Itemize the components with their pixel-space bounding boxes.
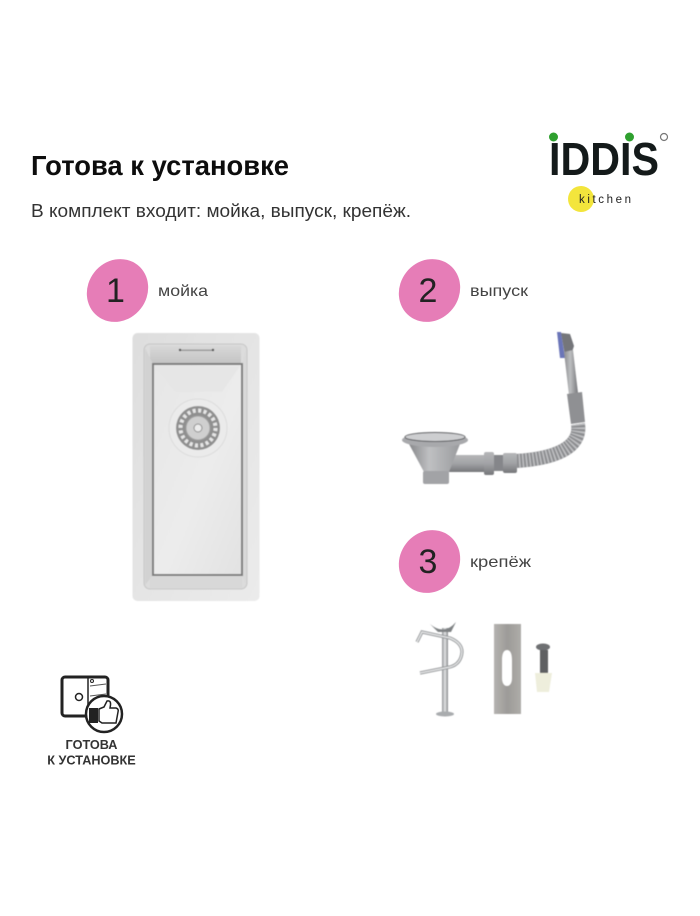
logo: IDDIS kitchen: kitchen [579, 194, 631, 206]
blue clip [557, 332, 565, 358]
mounting hardware photo [417, 622, 552, 716]
logo: IDDIS kitchen [549, 132, 668, 216]
vertical tube [564, 350, 578, 395]
badge 2: 2 [419, 272, 437, 310]
ready-to-install icon with caption: К УСТАНОВКЕ [47, 754, 136, 768]
sink photo [132, 333, 260, 601]
drain [169, 399, 227, 457]
back ledge [150, 346, 241, 363]
logo: IDDIS kitchen: IDDIS [549, 133, 659, 185]
badge 2 [386, 247, 473, 334]
badge 1: 1 [106, 272, 125, 310]
clamp rod [442, 628, 448, 713]
label: крепёж: крепёж [470, 554, 531, 571]
screw and plug [536, 644, 550, 650]
badge 3 [386, 518, 473, 605]
plate [494, 624, 521, 714]
subtitle: В комплект входит: мойка, выпуск, крепёж. [31, 201, 411, 221]
badge 1 [74, 247, 161, 334]
ready-to-install icon with caption [47, 677, 136, 768]
icon: sink and thumbs up [62, 677, 122, 732]
overflow slot [180, 350, 213, 351]
caption: ГОТОВА [66, 738, 117, 752]
label: мойка: мойка [158, 283, 208, 300]
label: выпуск: выпуск [470, 283, 529, 300]
badge 3: 3 [419, 543, 437, 581]
horizontal pipe [448, 455, 488, 472]
flange [402, 433, 468, 447]
title: Готова к установке [31, 150, 289, 181]
bowl body [409, 444, 460, 472]
drain fitting photo [402, 332, 585, 484]
